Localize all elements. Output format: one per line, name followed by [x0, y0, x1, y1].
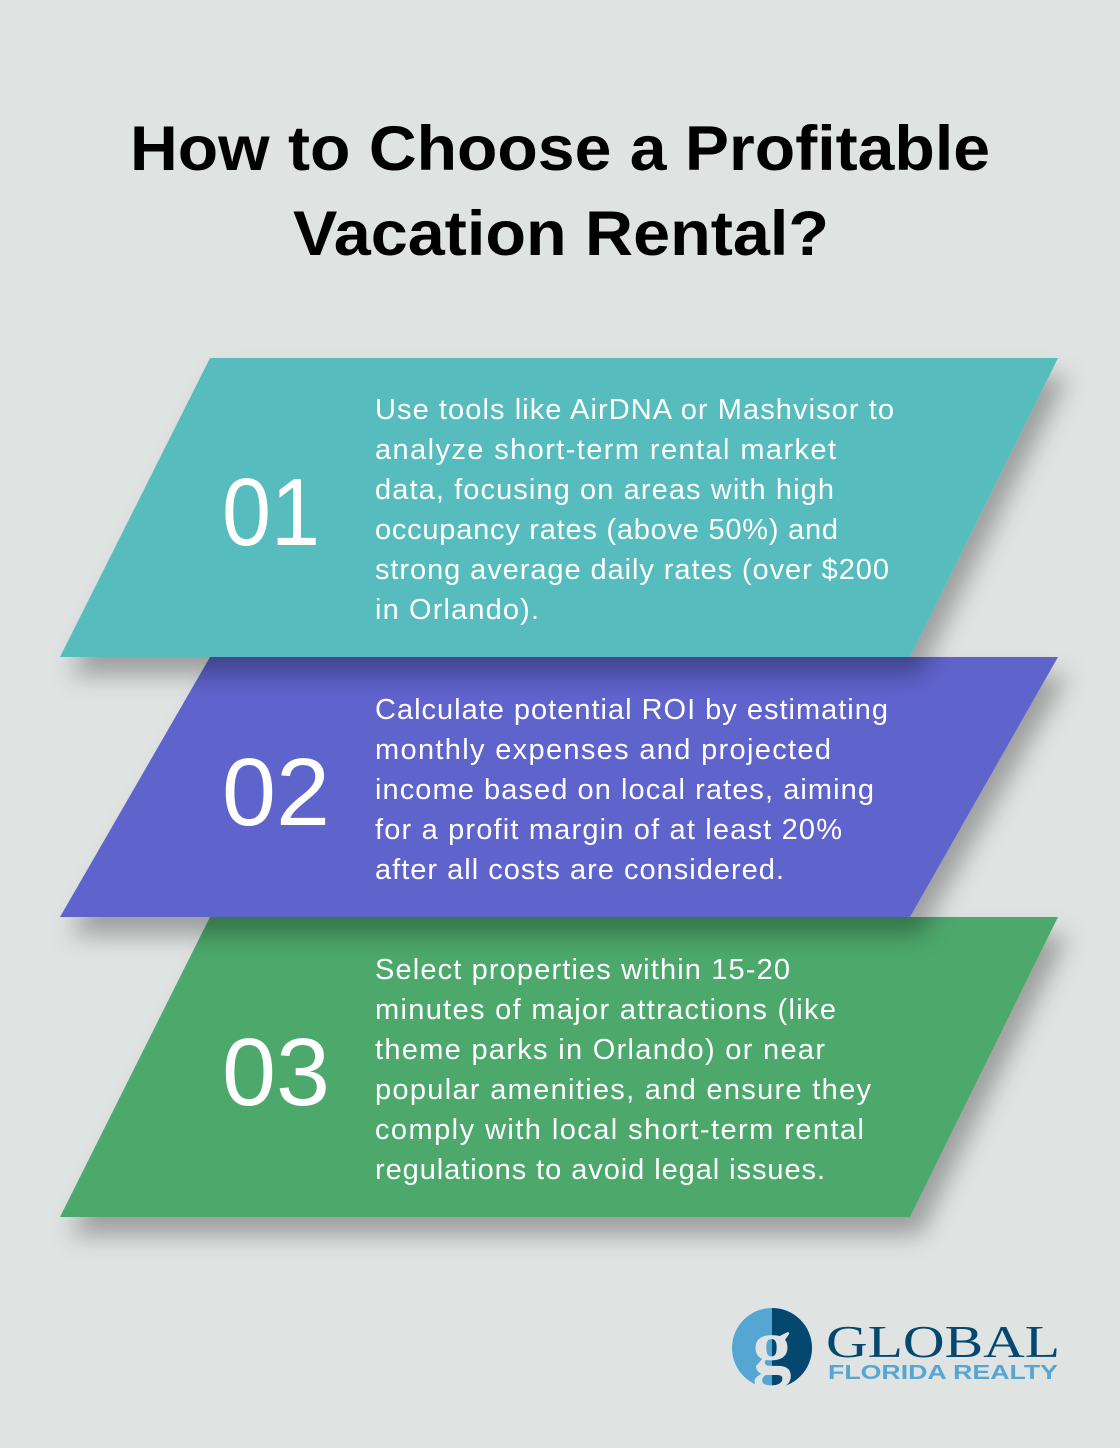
text: step 3 [375, 954, 872, 1186]
title [130, 114, 990, 269]
logo [732, 1302, 1060, 1389]
text: step 3: theme parks in Orlando) or near [375, 1034, 825, 1066]
title: Vacation Rental? [293, 199, 829, 269]
text: step 2: for a profit margin of at least 20% [375, 814, 842, 846]
text: step 3: Select properties within 15-20 [375, 954, 790, 986]
text: step 2: after all costs are considered. [375, 854, 784, 886]
text: step 1: data, focusing on areas with high [375, 474, 834, 506]
text: step 3: minutes of major attractions (like [375, 994, 836, 1026]
text: step 2: monthly expenses and projected [375, 734, 831, 766]
number: 02: 02 [222, 739, 330, 846]
text: step 3: comply with local short-term rental [375, 1114, 864, 1146]
number: 01: 01 [222, 459, 320, 566]
text: step 2: income based on local rates, aiming [375, 774, 874, 806]
text: step 1: Use tools like AirDNA or Mashvisor to [375, 394, 894, 426]
text: step 3: popular amenities, and ensure they [375, 1074, 872, 1106]
text: step 1: strong average daily rates (over $200 [375, 554, 889, 586]
text: step 1: analyze short-term rental market [375, 434, 836, 466]
icon: g circle [732, 1302, 812, 1389]
text: step 2 [375, 694, 888, 886]
text: step 1 [375, 394, 894, 626]
text: step 1: in Orlando). [375, 594, 539, 626]
logo: FLORIDA REALTY [828, 1362, 1059, 1384]
number: 03: 03 [222, 1019, 330, 1126]
panel: step 2 [60, 657, 1058, 917]
panel: step 1 [60, 358, 1058, 657]
text: step 1: occupancy rates (above 50%) and [375, 514, 838, 546]
text: step 3: regulations to avoid legal issues. [375, 1154, 825, 1186]
title: How to Choose a Profitable [130, 114, 990, 184]
text: step 2: Calculate potential ROI by estimating [375, 694, 888, 726]
icon: g circle: g [752, 1302, 792, 1389]
panel: step 3 [60, 917, 1058, 1217]
logo text: GLOBAL [826, 1316, 1060, 1367]
